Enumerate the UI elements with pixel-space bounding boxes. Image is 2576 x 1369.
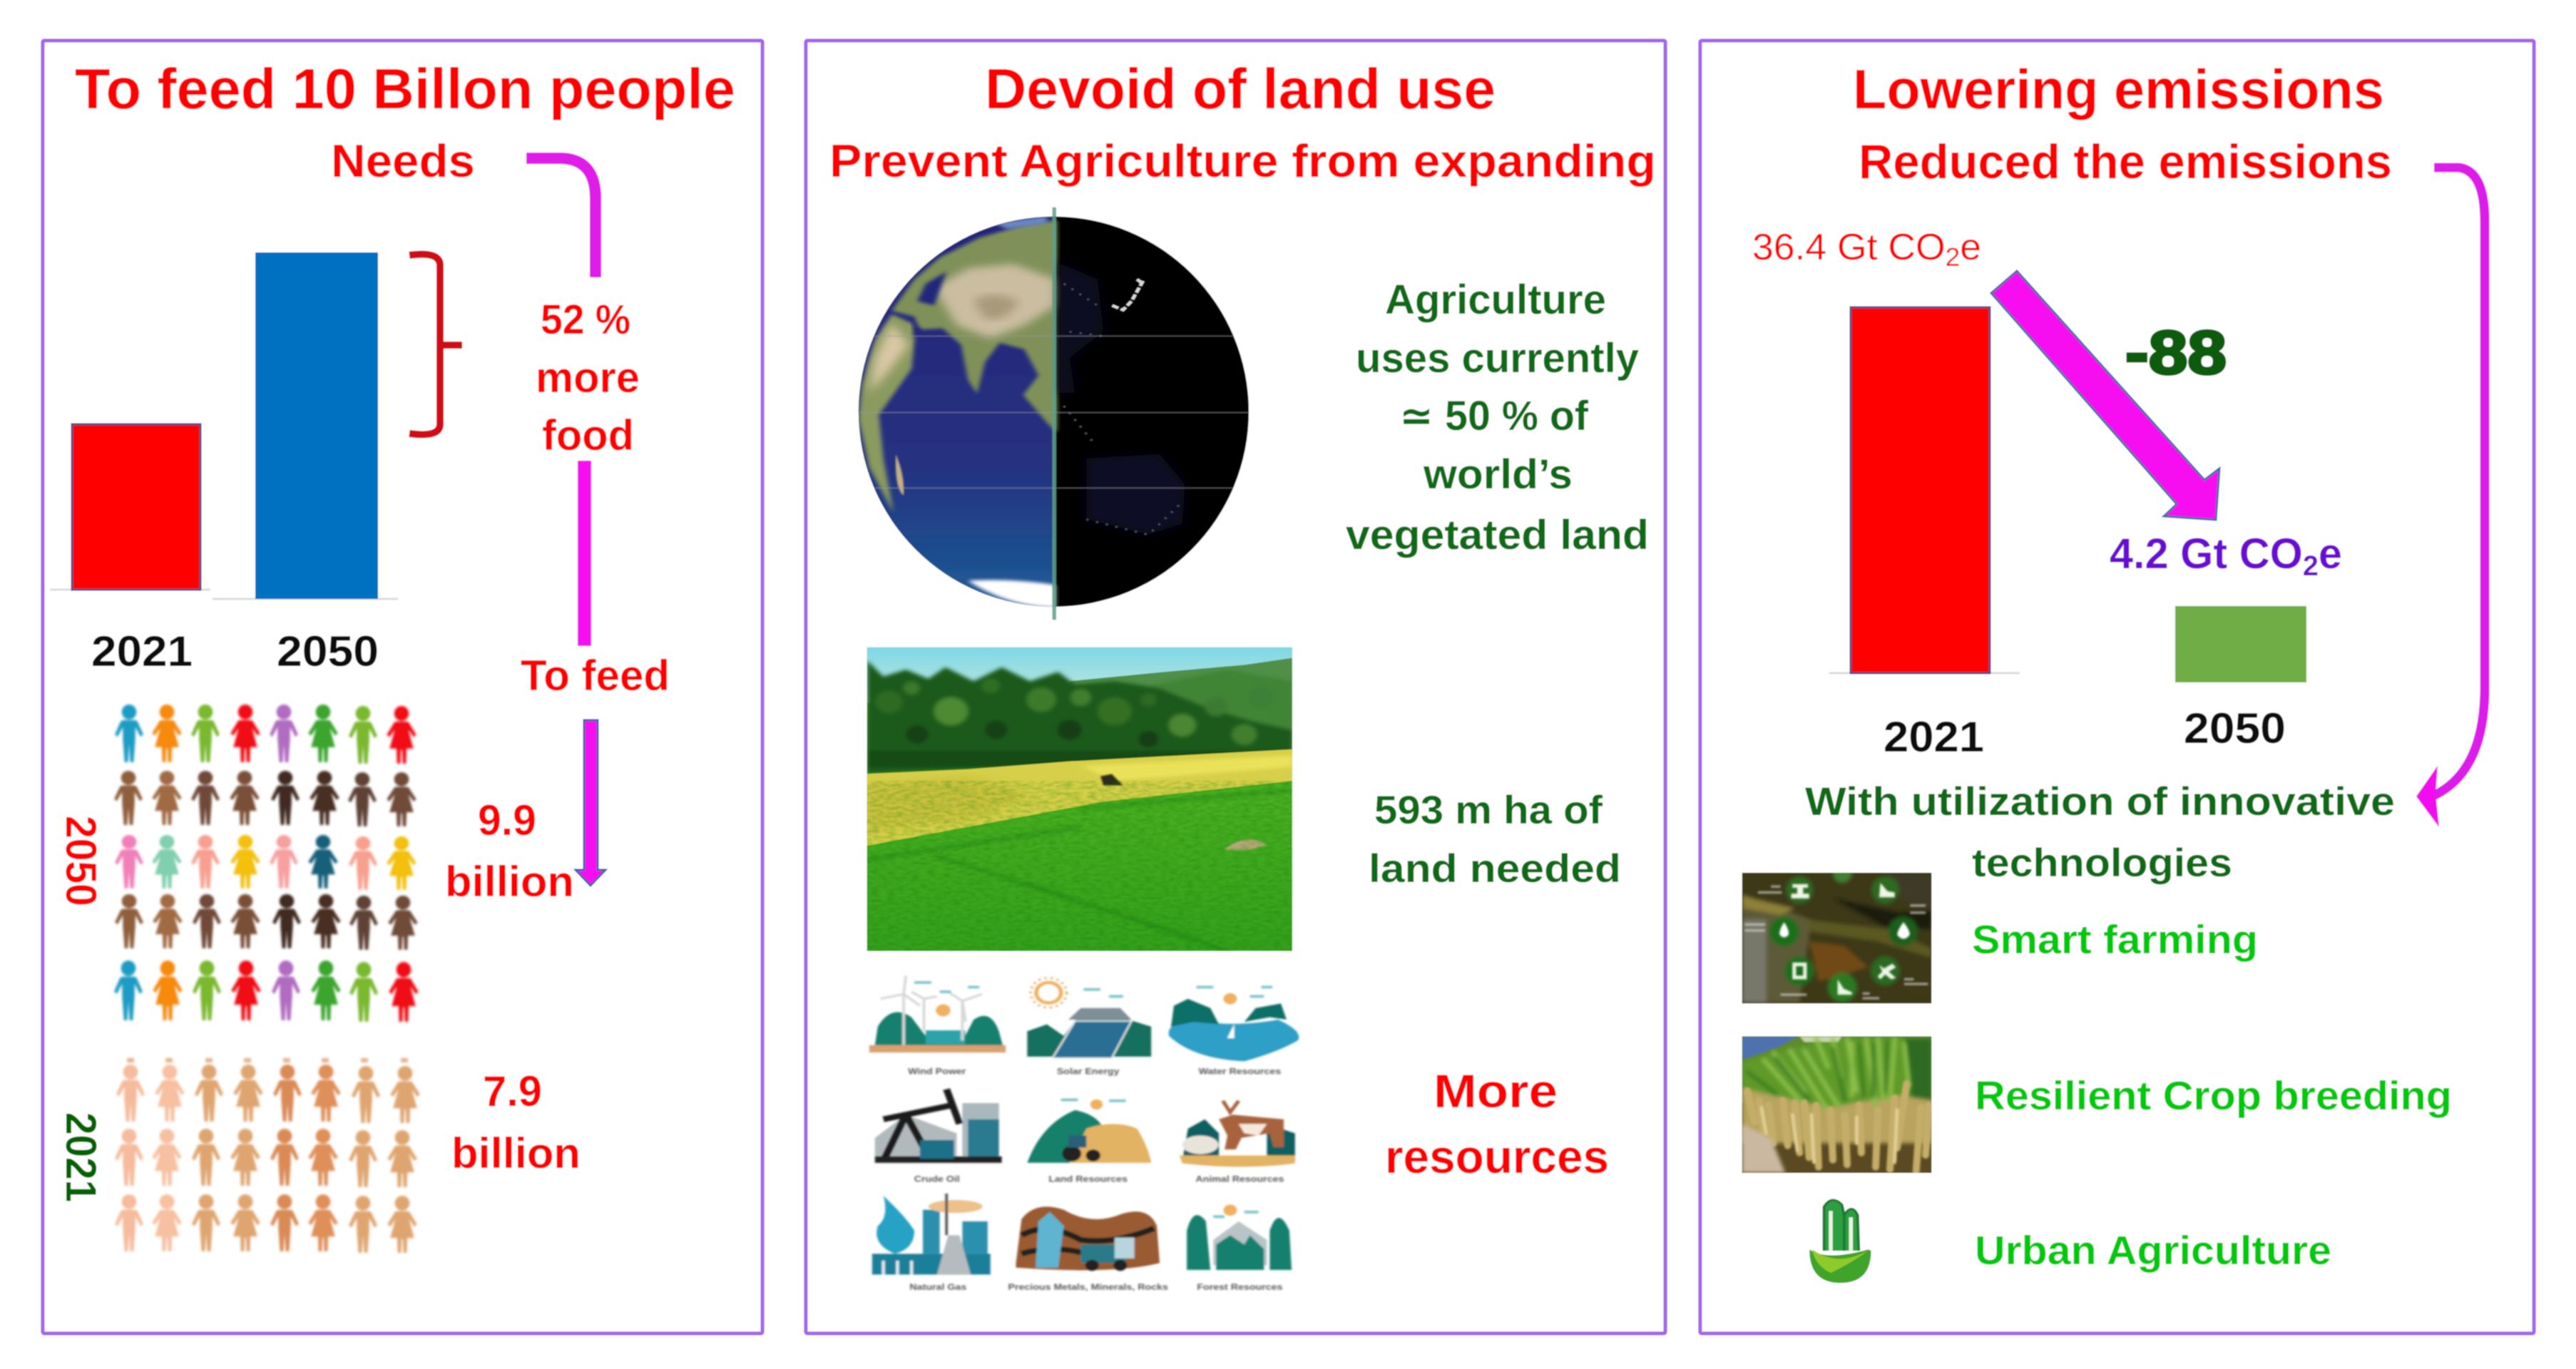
icon: crude oil — [875, 1089, 1002, 1184]
icon: precious metals, minerals, rocks — [1008, 1206, 1168, 1292]
people grid: 2021 population — [115, 1058, 420, 1253]
text: 593 m ha of land needed: land needed — [1369, 846, 1621, 891]
text: 593 m ha of land needed: 593 m ha of — [1374, 787, 1603, 832]
icon: crude oil: Crude Oil — [914, 1174, 960, 1184]
icon: land resources — [1027, 1099, 1151, 1184]
label: minus 88: -88 — [2125, 319, 2227, 387]
text: with utilization of innovative technologies — [1805, 779, 2395, 885]
label: resilient crop breeding: Resilient Crop breeding — [1975, 1073, 2452, 1119]
bar: 2021 — [72, 424, 200, 590]
subheading: reduced the emissions: Reduced the emissions — [1859, 135, 2392, 189]
icon: natural gas: Natural Gas — [909, 1282, 966, 1292]
rotated label: 2050: 2050 — [57, 816, 105, 906]
photo: resilient crop — [1742, 1036, 1931, 1173]
label: smart farming: Smart farming — [1972, 917, 2258, 963]
subheading: prevent agriculture from expanding: Prevent Agriculture from expanding — [829, 135, 1656, 187]
label: 9.9 billion: 9.9 — [478, 796, 536, 844]
connector: needs to 52 percent — [526, 158, 596, 277]
icon: solar energy — [1027, 978, 1151, 1076]
label: 2050: 2050 — [2184, 704, 2286, 752]
icon: land resources: Land Resources — [1048, 1174, 1128, 1184]
label: 7.9 billion — [451, 1067, 581, 1177]
connector: food to to feed — [578, 461, 591, 646]
label: 7.9 billion: 7.9 — [483, 1067, 542, 1115]
panel: lowering emissions — [1700, 41, 2534, 1333]
icon: wind power: Wind Power — [908, 1067, 966, 1076]
text: 593 m ha of land needed — [1369, 787, 1621, 891]
label: 36.4 gt co2e: 2 — [1946, 242, 1960, 272]
label: 2021: 2021 — [1884, 713, 1984, 761]
text: agriculture uses 50 percent: vegetated land — [1346, 512, 1649, 558]
text: agriculture uses 50 percent: Agriculture — [1385, 277, 1606, 323]
icon: water resources: Water Resources — [1199, 1067, 1281, 1076]
callout: 52 percent more food: 52 % — [541, 297, 630, 343]
label: 4.2 gt co2e: e — [2319, 530, 2342, 578]
icon: precious metals, minerals, rocks: Precious Metals, Minerals, Rocks — [1008, 1282, 1168, 1292]
bracket: food gap — [409, 255, 462, 434]
icon: animal resources: Animal Resources — [1195, 1174, 1284, 1184]
label: urban agriculture: Urban Agriculture — [1975, 1228, 2331, 1273]
icon: solar energy: Solar Energy — [1057, 1067, 1120, 1076]
rotated label: 2021: 2021 — [57, 1112, 105, 1202]
label: more resources — [1385, 1065, 1609, 1183]
label: 9.9 billion — [445, 796, 574, 906]
text: agriculture uses 50 percent: world’s — [1423, 451, 1573, 498]
icon: water resources — [1169, 987, 1299, 1076]
text: agriculture uses 50 percent: ≃ 50 % of — [1399, 393, 1589, 439]
bar: 2021 emissions — [1851, 307, 1990, 673]
label: 2050: 2050 — [277, 627, 379, 675]
photo: smart farming — [1742, 864, 1931, 1003]
icon: natural gas — [872, 1194, 991, 1292]
label: 36.4 gt co2e: 36.4 Gt CO — [1752, 227, 1940, 268]
curved arrow: emissions to innovative technologies — [2416, 168, 2485, 827]
label: needs: Needs — [331, 135, 475, 187]
label: 4.2 gt co2e: 4.2 Gt CO — [2110, 530, 2304, 578]
text: agriculture uses 50 percent: uses currently — [1356, 335, 1639, 381]
panel: to feed 10 billion people — [43, 41, 762, 1333]
bar: 2050 emissions — [2175, 606, 2306, 682]
icon: earth globe day and night — [855, 207, 1252, 620]
heading: to feed 10 billon people: To feed 10 Billon people — [75, 57, 735, 121]
label: to feed: To feed — [521, 652, 670, 699]
arrow: down to 9.9 billion — [576, 720, 605, 886]
label: 4.2 gt co2e: 2 — [2303, 550, 2319, 582]
text: with utilization of innovative technologies: With utilization of innovative — [1805, 779, 2395, 824]
text: with utilization of innovative technologies: technologies — [1972, 840, 2232, 885]
callout: 52 percent more food — [536, 297, 640, 459]
label: 36.4 gt co2e: e — [1960, 227, 1981, 268]
arrow: emissions decrease — [1991, 271, 2219, 520]
label: 7.9 billion: billion — [451, 1129, 581, 1177]
callout: 52 percent more food: food — [542, 411, 634, 459]
panel: devoid of land use — [806, 41, 1665, 1333]
bar: 2050 — [255, 252, 378, 599]
icon: animal resources — [1180, 1101, 1295, 1184]
photo: rice field — [867, 647, 1292, 951]
icon: forest resources: Forest Resources — [1197, 1282, 1282, 1292]
callout: 52 percent more food: more — [536, 354, 640, 401]
heading: lowering emissions: Lowering emissions — [1853, 58, 2384, 121]
label: 9.9 billion: billion — [445, 858, 574, 906]
heading: devoid of land use: Devoid of land use — [985, 57, 1496, 121]
bar chart: food demand — [50, 252, 398, 675]
icon: urban agriculture — [1809, 1200, 1871, 1283]
label: more resources: More — [1433, 1065, 1558, 1117]
icon grid: natural resources — [869, 975, 1299, 1292]
bar chart: emissions — [1829, 307, 2306, 761]
icon: wind power — [869, 975, 1006, 1076]
label: more resources: resources — [1385, 1130, 1609, 1183]
text: agriculture uses 50 percent — [1346, 277, 1649, 558]
icon: forest resources — [1187, 1204, 1292, 1292]
people grid: 2050 population — [114, 704, 419, 1022]
label: 2021: 2021 — [91, 627, 193, 675]
